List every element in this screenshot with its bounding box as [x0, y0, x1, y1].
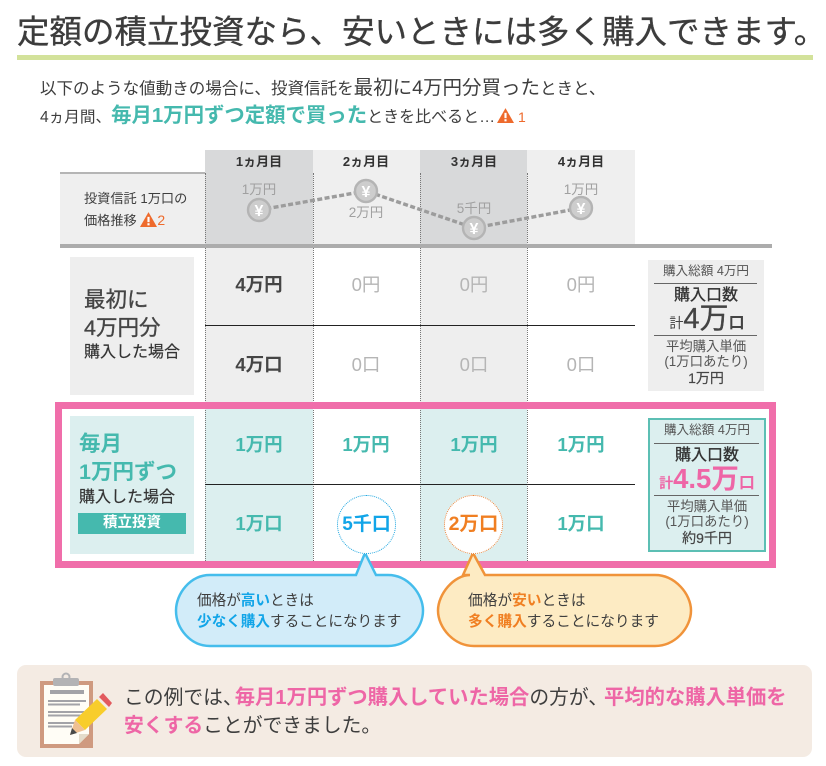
panel: lump-sum summary: 購入総額 4万円 — [663, 264, 749, 278]
lump-sum values — [205, 274, 635, 375]
price trend line chart: 2万円 — [349, 205, 383, 220]
monthly values: 1万円 — [450, 434, 498, 455]
panel: lump-sum label: 4万円分 — [84, 316, 160, 340]
lump-sum values: 0円 — [567, 274, 595, 295]
lump-sum values: 4万円 — [235, 274, 283, 295]
price trend line chart: 5千円 — [457, 201, 491, 216]
lump-sum values: 0口 — [567, 354, 595, 375]
header month 4: 4ヵ月目 — [558, 154, 604, 169]
icon: clipboard and pencil — [40, 672, 112, 748]
panel: monthly label: 購入した場合 — [79, 489, 175, 506]
circle: 2万口 — [444, 495, 503, 554]
callout text: high price: 少なく購入することになります — [197, 614, 401, 630]
conclusion text: 安くすることができました。 — [124, 715, 381, 737]
panel: lump-sum summary — [648, 260, 764, 391]
lump-sum values: 0口 — [352, 354, 380, 375]
badge: 積立投資 — [78, 513, 186, 534]
price trend line chart — [242, 178, 598, 240]
header month 3: 3ヵ月目 — [451, 154, 497, 169]
price trend line chart: ¥ — [255, 203, 264, 220]
monthly values: 1万円 — [342, 434, 390, 455]
monthly values — [205, 434, 635, 534]
panel: lump-sum summary: (1万口あたり) — [664, 354, 748, 369]
panel: lump-sum label — [70, 257, 194, 395]
panel: monthly label — [70, 416, 194, 554]
panel: pink highlight frame — [55, 402, 776, 568]
panel: monthly label: 1万円ずつ — [79, 460, 177, 484]
price trend line chart: ¥ — [362, 184, 371, 201]
lump-sum values: 4万口 — [235, 354, 283, 375]
panel: lump-sum summary: 購入口数 — [674, 287, 738, 304]
price trend line chart: 1万円 — [242, 182, 276, 197]
circle: 5千口 — [337, 495, 396, 554]
lump-sum values: 0円 — [460, 274, 488, 295]
header month 1: 1ヵ月目 — [236, 154, 282, 169]
thick row divider — [60, 244, 772, 248]
monthly values: 1万円 — [557, 434, 605, 455]
price trend line chart: ¥ — [470, 221, 479, 238]
panel: lump-sum summary: 計4万口 — [669, 303, 745, 335]
intro line 1: 以下のような値動きの場合に、投資信託を最初に4万円分買ったときと、 — [40, 77, 605, 99]
header month 2: 2ヵ月目 — [343, 154, 389, 169]
conclusion text: この例では、毎月1万円ずつ購入していた場合の方が、平均的な購入単価を — [124, 687, 787, 709]
price trend line chart: ¥ — [577, 201, 586, 218]
monthly values: 1万口 — [557, 513, 605, 534]
lump-sum values: 0口 — [460, 354, 488, 375]
panel: monthly summary: 平均購入単価 — [667, 499, 747, 514]
month headers — [236, 154, 604, 169]
price trend row label: 価格推移 2 — [84, 212, 165, 228]
panel: lump-sum summary: 1万円 — [688, 370, 724, 386]
panel: monthly summary: 計4.5万口 — [659, 463, 755, 494]
circle: 2万口: 2万口 — [449, 513, 498, 535]
callout text: high price — [197, 592, 401, 630]
badge: 積立投資: 積立投資 — [103, 515, 161, 531]
panel: lump-sum summary: 平均購入単価 — [666, 339, 746, 354]
monthly values: 1万円 — [235, 434, 283, 455]
callout text: low price: 多く購入することになります — [468, 614, 659, 630]
panel: lump-sum label: 最初に — [84, 288, 149, 312]
callout: low price bubble — [436, 554, 692, 648]
intro line 2: 4ヵ月間、毎月1万円ずつ定額で買ったときを比べると… 1 — [40, 105, 526, 127]
lump-sum values: 0円 — [352, 274, 380, 295]
callout text: low price: 価格が安いときは — [468, 593, 586, 609]
callout text: high price: 価格が高いときは — [197, 593, 314, 609]
callout: high price bubble — [174, 554, 424, 648]
price trend row label: 投資信託 1万口の — [84, 191, 187, 206]
panel: monthly summary — [648, 418, 766, 552]
panel: lump-sum label: 購入した場合 — [84, 344, 180, 361]
panel: conclusion — [17, 665, 812, 757]
title: 定額の積立投資なら、安いときには多く購入できます。 — [17, 14, 826, 50]
price trend row label — [84, 191, 187, 228]
month column shading — [60, 150, 635, 561]
panel: monthly summary: 約9千円 — [682, 530, 732, 546]
monthly values: 1万口 — [235, 513, 283, 534]
panel: monthly summary: 購入口数 — [675, 447, 739, 464]
panel: monthly label: 毎月 — [79, 432, 122, 456]
callout text: low price — [468, 592, 659, 630]
title underline — [17, 55, 813, 60]
panel: monthly summary: 購入総額 4万円 — [664, 423, 750, 437]
intro text — [40, 77, 605, 127]
conclusion text — [124, 686, 787, 737]
circle: 5千口: 5千口 — [342, 514, 391, 535]
price trend line chart: 1万円 — [564, 182, 598, 197]
panel: monthly summary: (1万口あたり) — [665, 514, 749, 529]
